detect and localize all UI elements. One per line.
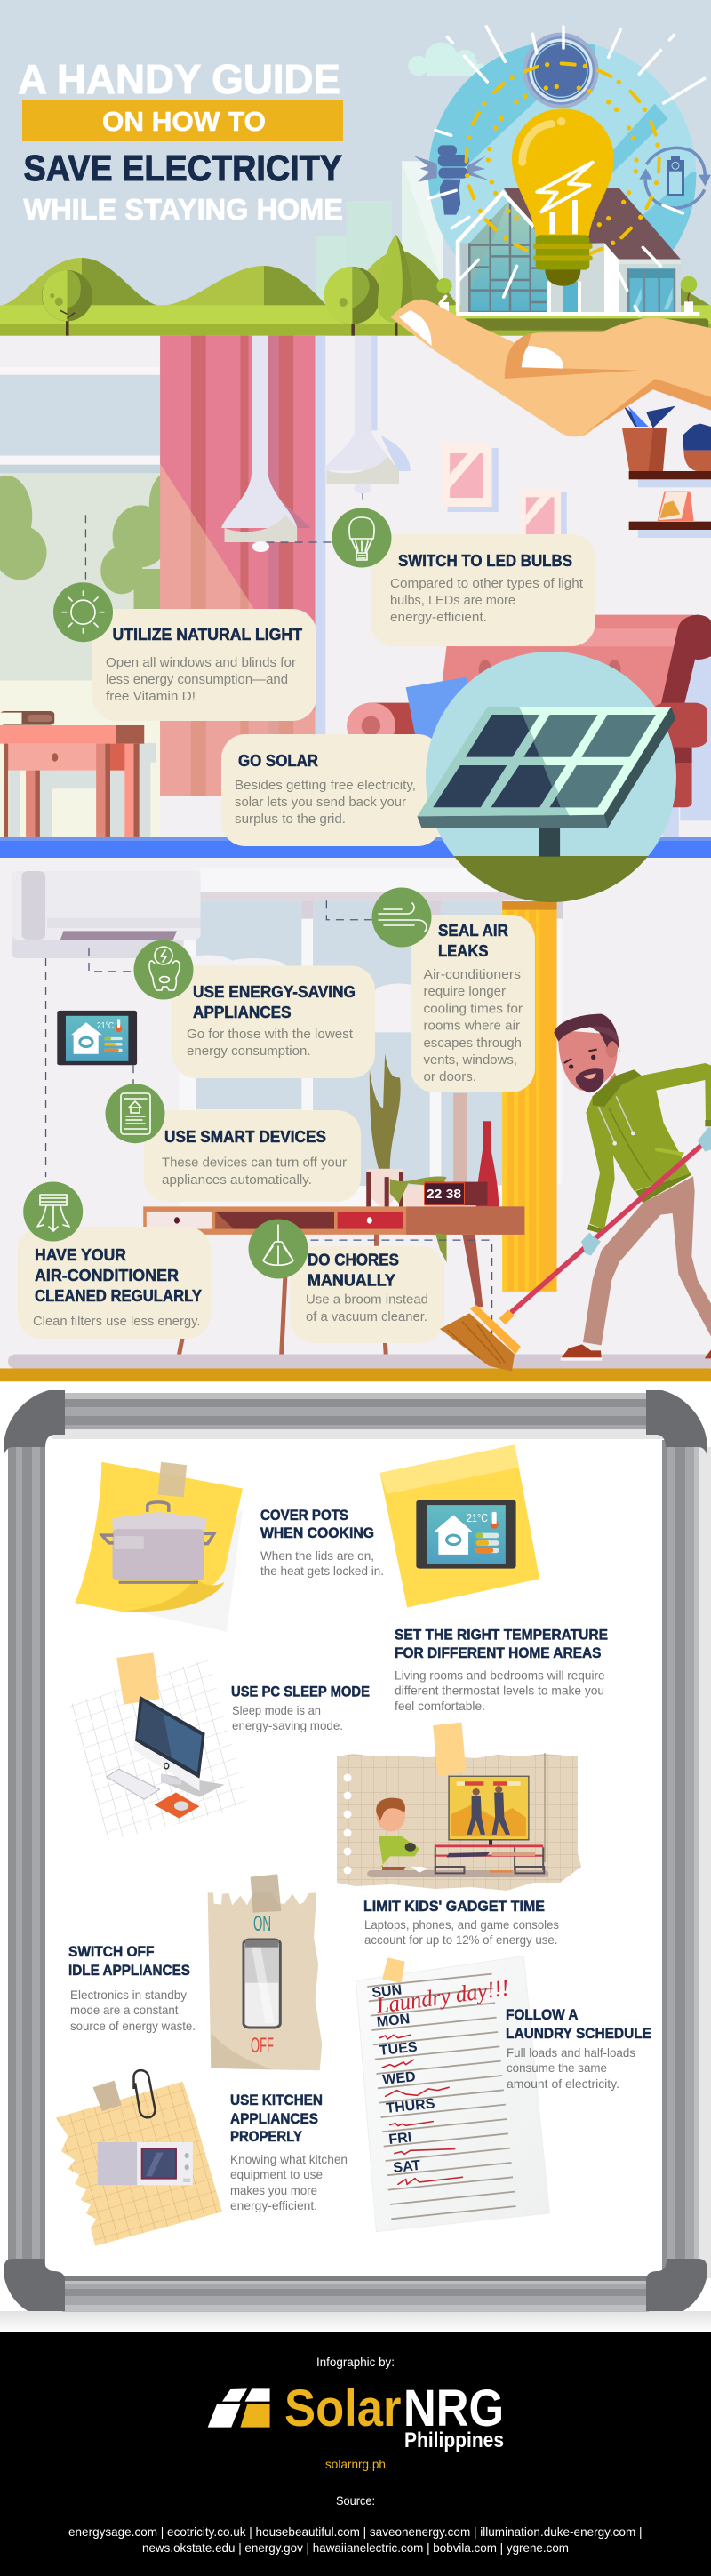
text: use kitchen appliances: equipment to use [230,2167,323,2181]
card: use smart devices [144,1110,361,1202]
card: seal air leaks: LEAKS [438,942,489,960]
connector dashes upper room [85,493,363,580]
text: switch off idle appliances: IDLE APPLIANCES [68,1962,190,1979]
card: seal air leaks: require longer [423,984,506,999]
gloves [581,1127,711,1256]
text: use PC sleep mode: Sleep mode is an [232,1703,321,1717]
text: switch off idle appliances [68,1943,196,2033]
text: limit kids gadget time [363,1898,559,1947]
text: limit kids gadget time: account for up to 12% of energy use. [364,1932,558,1947]
yellow energy dashes [465,62,660,253]
clouds [408,43,643,94]
text: follow a laundry schedule [506,2006,651,2091]
card: utilize natural light [92,609,316,721]
card: do chores manually: of a vacuum cleaner. [306,1309,427,1324]
card: do chores manually [290,1246,444,1343]
laundry list days: MON [376,2012,411,2030]
text: cover pots: WHEN COOKING [260,1524,374,1541]
text: set the right temperature [395,1627,608,1713]
TV with game [435,1776,543,1876]
card: go solar: solar lets you send back your [235,795,406,810]
laundry list days: THURS [386,2096,436,2116]
clock time: 22 38 [427,1187,461,1202]
laundry paper [356,1956,549,2232]
switch labels [251,1912,274,2058]
card: use energy-saving appliances: APPLIANCES [193,1004,292,1021]
logo: SolarNRG Philippines: Solar [284,2380,402,2437]
pot [102,1502,214,1584]
card: seal air leaks [411,915,535,1092]
card: utilize natural light: UTILIZE NATURAL LIGHT [112,626,302,644]
laundry list days: Laundry day!!! [374,1974,510,2019]
yellow curtain [502,901,557,1292]
text: cover pots [260,1507,384,1578]
whiteboard frame [4,1390,711,2315]
text: follow a laundry schedule: FOLLOW A [506,2006,578,2023]
energy scene background [409,32,711,262]
text: use kitchen appliances: PROPERLY [230,2128,303,2145]
hand holding the bulb [391,300,711,436]
text: cover pots: the heat gets locked in. [260,1564,384,1578]
source list: news.okstate.edu | energy.gov | hawaiianelectric.com | bobvila.com | ygrene.com [142,2540,569,2555]
card: go solar [221,734,442,846]
switch labels: OFF [251,2034,274,2058]
shoes [561,1343,711,1361]
laundry list days: SUN [371,1983,403,2001]
icon: globe [523,33,599,108]
card: have your air-conditioner cleaned: Clean filters use less energy. [33,1314,201,1329]
text: follow a laundry schedule: amount of electricity. [507,2076,619,2091]
kitchen grid paper [56,2070,222,2246]
person sweeping with broom [440,1014,711,1372]
title: WHILE STAYING HOME [23,193,343,226]
hills [0,251,711,306]
text: use PC sleep mode [231,1684,370,1732]
switch [244,1940,280,2028]
tablet temperature: 21°C [97,1021,114,1031]
icon: CFL bulb [413,145,491,215]
footer [0,2311,711,2576]
head [554,1014,619,1092]
icon: smart device [105,1084,165,1143]
grid paper: kids gadget time [337,1723,581,1891]
card: utilize natural light: Open all windows and blinds for [106,655,296,670]
shelves with plants [622,406,711,538]
text: set the right temperature: SET THE RIGHT TEMPERATURE [395,1627,608,1644]
top bar [62,1393,649,1429]
red scribbles [380,2035,462,2184]
laundry list days: FRI [388,2130,412,2148]
card: utilize natural light: free Vitamin D! [106,689,196,704]
card: switch to LED bulbs [371,534,595,646]
title: A HANDY GUIDE [18,56,340,102]
logo: SolarNRG Philippines [208,2380,504,2452]
kid legs [382,1867,406,1873]
solar panel bubble [417,652,676,902]
grid paper: PC [69,1652,249,1841]
card: seal air leaks: cooling times for [423,1001,523,1017]
text: set the right temperature: FOR DIFFERENT HOME AREAS [395,1644,601,1661]
text: use kitchen appliances: APPLIANCES [230,2110,318,2127]
card: switch to LED bulbs: SWITCH TO LED BULBS [398,552,572,570]
text: limit kids gadget time: Laptops, phones, and game consoles [364,1917,559,1932]
ceiling lamps [221,336,411,552]
source heading: Source: [336,2493,375,2508]
text: set the right temperature: different thermostat levels to make you [395,1684,604,1698]
blue floor strip [0,837,711,858]
logo: SolarNRG Philippines: Philippines [404,2428,504,2452]
light bulb [512,108,614,286]
right bar [662,1440,699,2280]
card: seal air leaks: rooms where air [423,1019,520,1034]
light rays [428,27,705,316]
scene: landscape [0,235,711,336]
tablet temperature large: 21°C [467,1511,488,1524]
city buildings [316,161,443,308]
card: do chores manually: Use a broom instead [306,1292,428,1307]
icon: sun [53,582,113,642]
laundry list days: SAT [393,2158,421,2176]
left bar [8,1440,45,2280]
laundry list days [371,1974,510,2176]
window [180,868,711,1206]
sticky note: pot [75,1462,243,1632]
laundry list days: WED [382,2069,417,2088]
title: ON HOW TO [102,106,266,137]
card: use energy-saving appliances: Go for those with the lowest [187,1027,354,1042]
tree left [42,270,92,336]
card: do chores manually: MANUALLY [308,1271,395,1289]
card: seal air leaks: vents, windows, [423,1052,517,1068]
laundry list days: TUES [379,2040,419,2059]
hoodie [586,1063,711,1234]
text: use PC sleep mode: USE PC SLEEP MODE [231,1684,370,1700]
card: use energy-saving appliances: USE ENERGY-SAVING [193,983,356,1001]
card: go solar: surplus to the grid. [235,812,346,827]
text: switch off idle appliances: mode are a constant [70,2003,179,2017]
text: use kitchen appliances: makes you more [230,2183,317,2197]
icon: broom [249,1220,308,1278]
icon: piggy bank [133,940,194,999]
card: have your air-conditioner cleaned: HAVE YOUR [35,1246,126,1264]
switch labels: ON [253,1912,271,1936]
text: follow a laundry schedule: consume the same [507,2060,607,2075]
card: use smart devices: These devices can turn off your [162,1156,347,1171]
text: switch off idle appliances: source of energy waste. [70,2019,196,2033]
card: seal air leaks: or doors. [423,1069,476,1084]
text: cover pots: COVER POTS [260,1507,348,1524]
house [436,188,708,331]
text: set the right temperature: Living rooms and bedrooms will require [395,1668,605,1682]
card: use smart devices: appliances automatically. [162,1172,312,1188]
air-conditioner [12,871,201,958]
source list [68,2524,642,2555]
side table with book [0,711,156,837]
text: follow a laundry schedule: Full loads and half-loads [507,2045,635,2060]
card: utilize natural light: less energy consumption—and [106,672,288,687]
floor [0,1355,711,1381]
text: switch off idle appliances: SWITCH OFF [68,1943,155,1960]
scene: living room wall, window, curtains and furniture [0,336,711,858]
paperclip [134,2070,155,2117]
bottom bar [62,2276,649,2311]
card: go solar: Besides getting free electricity, [235,778,416,793]
source list: energysage.com | ecotricity.co.uk | housebeautiful.com | saveonenergy.com | illumination.duke-energy.com | [68,2524,642,2539]
card: seal air leaks: SEAL AIR [438,922,508,940]
neck and shirt [600,1073,619,1105]
wall tablet [57,1011,137,1065]
torn paper: on/off switch [208,1874,322,2070]
credit line: Infographic by: [316,2355,395,2369]
window left [0,367,191,837]
kid gaming [376,1798,419,1867]
text: cover pots: When the lids are on, [260,1548,374,1563]
computer [107,1696,225,1819]
title: SAVE ELECTRICITY [23,148,342,188]
framed pictures [441,443,567,540]
curtain [160,336,325,837]
card: go solar: GO SOLAR [238,752,318,770]
microwave [98,2142,193,2185]
text: use kitchen appliances: USE KITCHEN [230,2092,323,2108]
card: have your air-conditioner cleaned: CLEANED REGULARLY [35,1287,202,1305]
solar panel [417,707,675,857]
card: switch to LED bulbs: Compared to other types of light [390,576,584,591]
board notes lower [56,1874,549,2246]
text: use kitchen appliances [230,2092,348,2212]
text: follow a laundry schedule: LAUNDRY SCHEDULE [506,2025,651,2042]
card: use energy-saving appliances: energy consumption. [187,1044,311,1059]
connector dashes lower room [46,900,374,1177]
card: do chores manually: DO CHORES [308,1252,399,1269]
website: solarnrg.ph [325,2457,386,2471]
sticky note: thermostat [380,1444,539,1608]
tape [433,1723,466,1776]
tree middle [324,267,380,336]
icon: wind [371,887,432,948]
ground [0,305,711,336]
title [18,56,343,226]
text: use PC sleep mode: energy-saving mode. [232,1718,343,1732]
text: use kitchen appliances: Knowing what kitchen [230,2152,348,2166]
sofa [347,615,711,837]
scene: second room with window and air-conditioner [0,868,711,1381]
board notes upper [69,1444,539,1841]
tree cypress [378,235,413,336]
text: limit kids gadget time: LIMIT KIDS' GADGET TIME [363,1898,545,1915]
card: have your air-conditioner cleaned [18,1227,211,1339]
card: switch to LED bulbs: energy-efficient. [390,610,487,625]
card: have your air-conditioner cleaned: AIR-CONDITIONER [35,1267,179,1284]
legs [583,1176,711,1345]
text: set the right temperature: feel comfortable. [395,1699,485,1713]
card: switch to LED bulbs: bulbs, LEDs are more [390,593,515,608]
frame corners [4,1390,707,2315]
energy bubble [428,43,697,262]
text: use kitchen appliances: energy-efficient. [230,2198,317,2212]
text: switch off idle appliances: Electronics in standby [70,1988,187,2002]
icon: air-conditioner filter [23,1182,83,1241]
broom [440,1145,701,1372]
icon: battery recycle [639,148,711,208]
console table and decor [143,1053,524,1361]
card: seal air leaks: escapes through [423,1036,522,1051]
card: seal air leaks: Air-conditioners [423,967,521,982]
house, bulb and light rays [428,27,708,331]
logo: SolarNRG Philippines: NRG [403,2380,504,2437]
icon: LED bulb [332,508,391,567]
card: use energy-saving appliances [172,965,375,1078]
card: use smart devices: USE SMART DEVICES [164,1128,326,1146]
